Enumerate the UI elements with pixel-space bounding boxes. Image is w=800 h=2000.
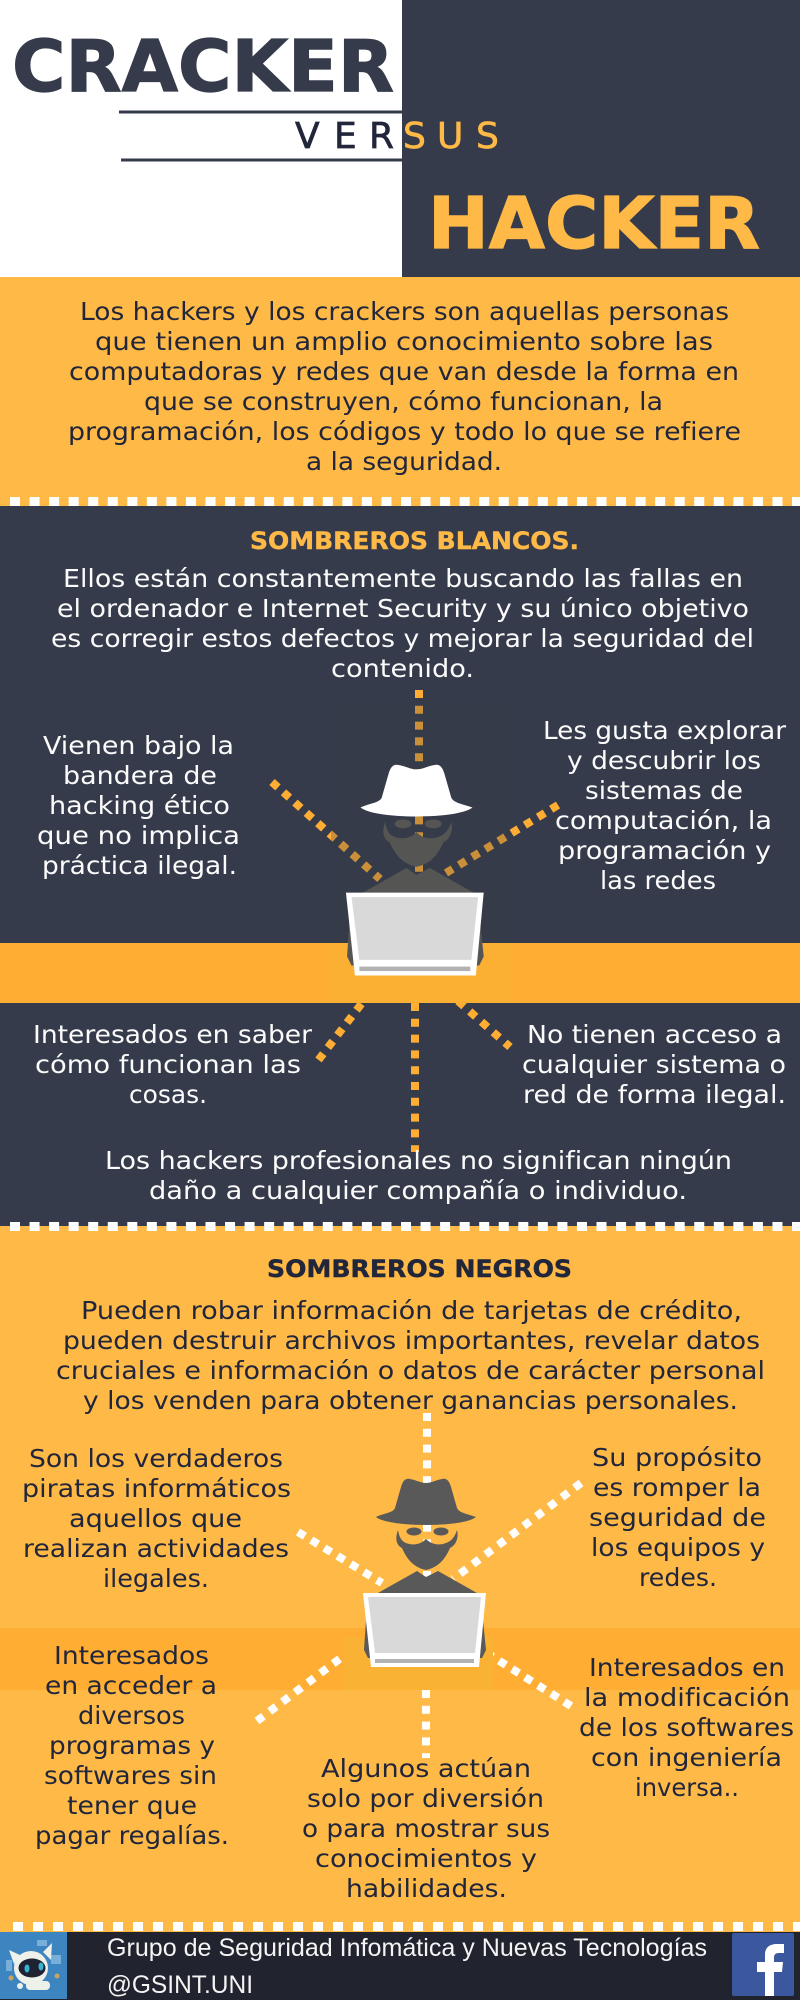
icon: hacker with black hat and laptop bbox=[363, 1479, 486, 1667]
text block: interested in how things work: cómo funcionan las bbox=[35, 1050, 301, 1079]
text block: access to programs: tener que bbox=[67, 1791, 197, 1820]
panel: sombreros negros bbox=[0, 1226, 800, 1932]
text block: for fun bbox=[302, 1754, 550, 1903]
text block: white hats description bbox=[51, 564, 754, 683]
text block: access to programs: Interesados bbox=[54, 1641, 209, 1670]
title: VERSUS: SUS bbox=[403, 116, 499, 157]
text block: black hats description bbox=[56, 1296, 765, 1415]
text block: reverse engineering: Interesados en bbox=[589, 1653, 785, 1682]
text block: access to programs: pagar regalías. bbox=[35, 1821, 229, 1850]
text block: purpose: seguridad de bbox=[589, 1503, 766, 1532]
text block: for fun: conocimientos y bbox=[315, 1844, 537, 1873]
text block: introduction: programación, los códigos y todo lo que se refiere bbox=[68, 417, 741, 446]
dotted rays: white hat upper bbox=[272, 690, 558, 879]
title: VERSUS bbox=[295, 116, 499, 157]
panel: sombreros blancos bbox=[0, 506, 800, 1226]
title: CRACKER: CRACKER bbox=[12, 25, 394, 108]
text block: purpose: los equipos y bbox=[591, 1533, 765, 1562]
text block: no illegal access: red de forma ilegal. bbox=[523, 1080, 786, 1109]
text block: true pirates: aquellos que bbox=[69, 1504, 242, 1533]
panel: introduction bbox=[0, 277, 800, 506]
text block: reverse engineering: la modificación bbox=[584, 1683, 790, 1712]
text block: interested in how things work bbox=[33, 1020, 313, 1109]
text block: access to programs bbox=[35, 1641, 229, 1850]
text block: reverse engineering: inversa.. bbox=[635, 1773, 739, 1802]
text block: purpose: es romper la bbox=[593, 1473, 761, 1502]
text block: white hats left: que no implica bbox=[37, 821, 240, 850]
text block: white hats right: Les gusta explorar bbox=[543, 716, 787, 745]
text block: for fun: Algunos actúan bbox=[321, 1754, 531, 1783]
text block: professional hackers: daño a cualquier compañía o individuo. bbox=[149, 1176, 687, 1205]
text block: reverse engineering: con ingeniería bbox=[591, 1743, 782, 1772]
text block: introduction: computadoras y redes que van desde la forma en bbox=[69, 357, 739, 386]
text block: access to programs: en acceder a bbox=[45, 1671, 217, 1700]
text block: no illegal access: cualquier sistema o bbox=[522, 1050, 786, 1079]
text block: black hats description: Pueden robar información de tarjetas de crédito, bbox=[81, 1296, 742, 1325]
text block: white hats right: las redes bbox=[600, 866, 716, 895]
text block: professional hackers: Los hackers profesionales no significan ningún bbox=[105, 1146, 732, 1175]
text block: access to programs: diversos bbox=[78, 1701, 185, 1730]
text block: black hats description: cruciales e información o datos de carácter personal bbox=[56, 1356, 765, 1385]
icon: facebook bbox=[732, 1933, 794, 1996]
text block: white hats right bbox=[543, 716, 787, 895]
heading: sombreros blancos: SOMBREROS BLANCOS. bbox=[250, 527, 579, 555]
text block: footer group name bbox=[107, 1934, 707, 1999]
title: HACKER: HACKER bbox=[428, 182, 760, 265]
text block: true pirates: piratas informáticos bbox=[22, 1474, 291, 1503]
text block: interested in how things work: cosas. bbox=[129, 1080, 207, 1109]
text block: footer group name: @GSINT.UNI bbox=[107, 1971, 253, 1999]
text block: introduction: que se construyen, cómo funcionan, la bbox=[144, 387, 663, 416]
text block: white hats description: contenido. bbox=[331, 654, 474, 683]
text block: true pirates: realizan actividades bbox=[23, 1534, 289, 1563]
text block: introduction: a la seguridad. bbox=[306, 447, 502, 476]
text block: white hats right: sistemas de bbox=[585, 776, 743, 805]
text block: black hats description: y los venden para obtener ganancias personales. bbox=[83, 1386, 738, 1415]
text block: white hats description: el ordenador e Internet Security y su único objetivo bbox=[57, 594, 749, 623]
text block: reverse engineering: de los softwares bbox=[579, 1713, 794, 1742]
text block: for fun: o para mostrar sus bbox=[302, 1814, 550, 1843]
text block: for fun: solo por diversión bbox=[307, 1784, 544, 1813]
text block: white hats left: hacking ético bbox=[49, 791, 230, 820]
text block: professional hackers bbox=[105, 1146, 732, 1205]
text block: no illegal access: No tienen acceso a bbox=[527, 1020, 782, 1049]
text block: white hats right: programación y bbox=[558, 836, 771, 865]
text block: white hats description: Ellos están constantemente buscando las fallas en bbox=[63, 564, 743, 593]
text block: interested in how things work: Interesados en saber bbox=[33, 1020, 313, 1049]
text block: white hats left bbox=[37, 731, 240, 880]
text block: access to programs: programas y bbox=[49, 1731, 215, 1760]
text block: white hats right: computación, la bbox=[555, 806, 772, 835]
text block: black hats description: pueden destruir archivos importantes, revelar datos bbox=[63, 1326, 760, 1355]
text block: introduction: que tienen un amplio conocimiento sobre las bbox=[95, 327, 713, 356]
text block: for fun: habilidades. bbox=[346, 1874, 507, 1903]
text block: purpose: Su propósito bbox=[592, 1443, 762, 1472]
text block: introduction: Los hackers y los crackers son aquellas personas bbox=[80, 297, 729, 326]
text block: white hats left: práctica ilegal. bbox=[42, 851, 237, 880]
text block: no illegal access bbox=[522, 1020, 786, 1109]
title: VERSUS: VER bbox=[295, 116, 394, 157]
panel: footer bbox=[0, 1932, 800, 2000]
icon: robot logo bbox=[0, 1932, 67, 1999]
text block: white hats left: Vienen bajo la bbox=[43, 731, 234, 760]
text block: purpose bbox=[589, 1443, 766, 1592]
text block: true pirates: ilegales. bbox=[103, 1564, 209, 1593]
text block: true pirates: Son los verdaderos bbox=[29, 1444, 283, 1473]
text block: footer group name: Grupo de Seguridad Infomática y Nuevas Tecnologías bbox=[107, 1934, 707, 1962]
band: white hat desk stripe bbox=[0, 943, 800, 1003]
text block: true pirates bbox=[22, 1444, 291, 1593]
text block: introduction bbox=[68, 297, 741, 476]
dotted rays: black hat bbox=[257, 1413, 581, 1758]
icon: hacker with white hat and laptop bbox=[346, 765, 484, 976]
panel: title header bbox=[0, 0, 800, 277]
text block: reverse engineering bbox=[579, 1653, 794, 1802]
heading: sombreros negros: SOMBREROS NEGROS bbox=[267, 1255, 572, 1283]
dotted rays: white hat lower bbox=[318, 1001, 510, 1152]
text block: access to programs: softwares sin bbox=[44, 1761, 217, 1790]
text block: white hats right: y descubrir los bbox=[567, 746, 761, 775]
text block: white hats left: bandera de bbox=[63, 761, 217, 790]
band: black hat desk stripe bbox=[0, 1628, 800, 1690]
text block: purpose: redes. bbox=[639, 1563, 717, 1592]
text block: white hats description: es corregir estos defectos y mejorar la seguridad del bbox=[51, 624, 754, 653]
